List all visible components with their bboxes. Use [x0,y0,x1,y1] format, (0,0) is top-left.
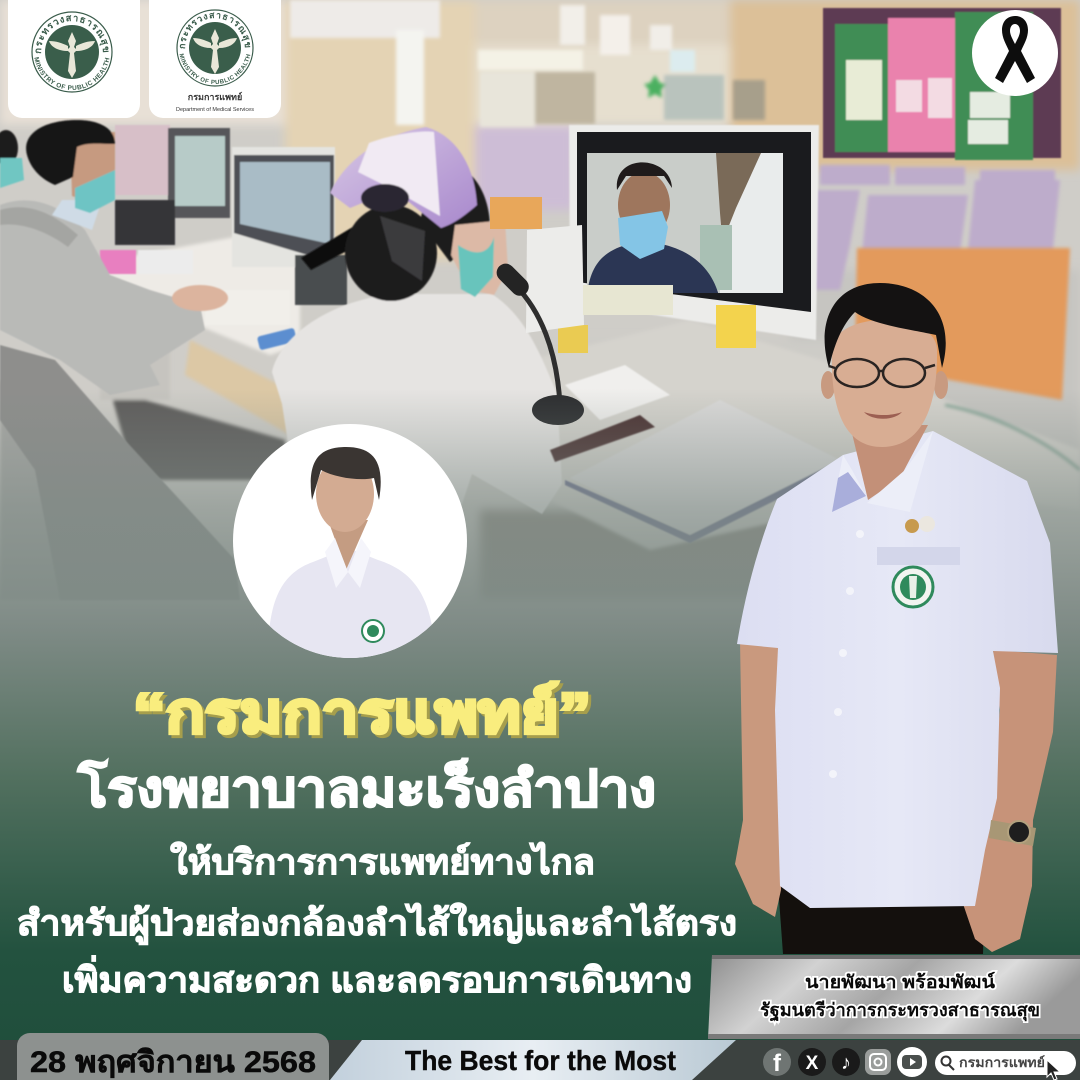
icon: instagram [865,1049,891,1075]
title: highlighted department name: “กรมการแพทย์” [133,681,591,744]
logo card: Department of Medical Services: กรมการแพทย์ [188,91,242,102]
buttons [829,530,864,778]
icon: X: X [806,1053,819,1074]
waiting chairs [800,165,1060,290]
search box: กรมการแพทย์ [959,1055,1045,1070]
orange bench [855,248,1070,400]
collar [832,431,933,512]
emblem: caduceus [49,32,95,78]
nurse [272,127,562,534]
trousers [778,885,985,954]
logo card: Ministry of Public Health: กระทรวงสาธารณสุข [36,15,109,54]
text block: service description: สำหรับผู้ป่วยส่องกล้องลำไส้ใหญ่และลำไส้ตรง [17,902,737,945]
left arm and hand [735,640,782,917]
logo card: Department of Medical Services: MINISTRY OF PUBLIC HEALTH [180,54,250,84]
glasses [829,359,935,387]
icon: tiktok [832,1048,860,1076]
footer bar [0,1033,1080,1080]
icon: black mourning ribbon [972,10,1058,96]
background photo: hospital telemedicine room [0,0,1080,612]
pins [905,519,919,533]
logo card: Department of Medical Services [149,0,281,118]
desk surfaces [0,225,1080,600]
logo card: Department of Medical Services: กระทรวงสาธารณสุข [180,12,250,49]
minister figure [735,283,1058,954]
left seated man [0,120,228,395]
badge [893,567,933,607]
shirt [737,431,1058,908]
left monitors [100,125,347,350]
slogan band: The Best for the Most [405,1045,676,1076]
title: highlighted department name: “กรมการแพทย์” [136,684,594,747]
bulletin board [823,8,1061,160]
watch [989,820,1036,846]
icon: tiktok: ♪ [841,1052,851,1074]
microphone [493,260,584,425]
date pill [17,1033,329,1080]
portrait circle: hospital director [233,424,467,660]
caption panel: minister name and title [708,955,1080,1039]
logo card: Ministry of Public Health [8,0,140,118]
icon: facebook [763,1048,791,1077]
office chair back [0,345,240,600]
pocket [877,547,960,565]
caption panel: minister name and title: รัฐมนตรีว่าการกระทรวงสาธารณสุข [760,1000,1040,1022]
centre monitor with patient [490,125,819,353]
slogan band [330,1040,736,1080]
logo card: Department of Medical Services: Department of Medical Services [176,107,254,113]
icon: X [798,1048,826,1076]
neck [850,425,928,500]
colleague at far left [0,130,24,188]
caption panel: minister name and title: นายพัฒนา พร้อมพัฒน์ [805,971,996,992]
icon: youtube [897,1047,927,1077]
back corridor details [290,0,765,127]
emblem: caduceus [193,29,237,74]
right arm and hand [960,650,1057,952]
logo card: Ministry of Public Health: MINISTRY OF PUBLIC HEALTH [34,57,110,90]
heading: hospital name: โรงพยาบาลมะเร็งลำปาง [77,758,656,817]
head [832,320,937,447]
icon: facebook: f [773,1050,782,1077]
search box [935,1051,1076,1080]
date pill: 28 พฤศจิกายน 2568 [30,1046,316,1079]
ears [821,371,835,399]
desk papers [550,365,840,543]
text block: service description [17,841,737,1000]
text block: service description: ให้บริการการแพทย์ทางไกล [170,841,595,882]
text block: service description: เพิ่มความสะดวก และลดรอบการเดินทาง [62,955,692,1000]
